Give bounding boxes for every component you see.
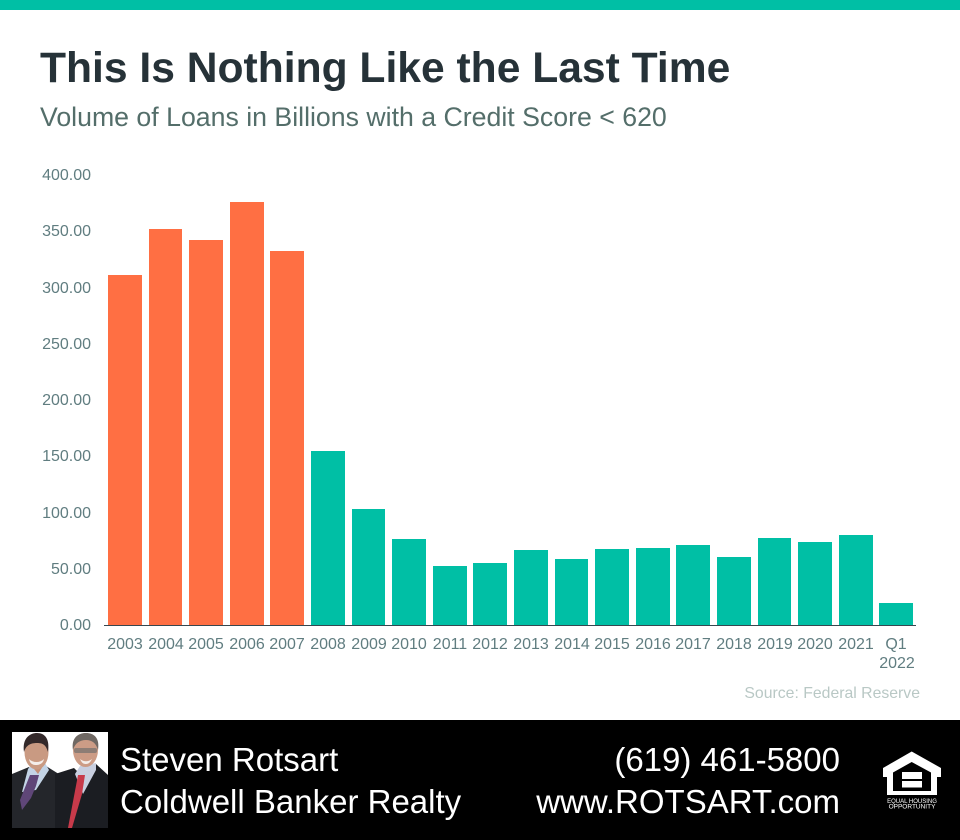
- left man: [12, 733, 64, 828]
- y axis labels: 200.00: [42, 392, 91, 409]
- x axis labels: [107, 636, 915, 672]
- agent photo: [12, 732, 108, 828]
- top accent bar: [0, 0, 960, 10]
- agent name and company: Steven Rotsart: [120, 741, 338, 778]
- y axis labels: 100.00: [42, 505, 91, 522]
- x axis labels: 2011: [433, 636, 467, 653]
- x axis labels: 2021: [838, 636, 874, 653]
- y axis labels: 350.00: [42, 223, 91, 240]
- x axis labels: 2015: [594, 636, 630, 653]
- title: This Is Nothing Like the Last Time: [40, 44, 730, 92]
- bar chart: [42, 167, 916, 672]
- icon: equal housing opportunity: [883, 752, 941, 810]
- x axis line: [104, 625, 916, 626]
- y axis labels: [42, 167, 91, 634]
- icon: equal housing opportunity: EQUAL HOUSING: [887, 799, 937, 805]
- x axis labels: 2016: [635, 636, 671, 653]
- footer band: [0, 720, 960, 840]
- x axis labels: 2003: [107, 636, 143, 653]
- icon: equal housing opportunity: OPPORTUNITY: [889, 804, 936, 810]
- x axis labels: 2013: [513, 636, 549, 653]
- y axis labels: 250.00: [42, 336, 91, 353]
- x axis labels: 2017: [675, 636, 711, 653]
- y axis labels: 50.00: [51, 561, 91, 578]
- x axis labels: 2008: [310, 636, 346, 653]
- agent name and company: Coldwell Banker Realty: [120, 783, 461, 820]
- subtitle: Volume of Loans in Billions with a Credit Score < 620: [40, 102, 667, 132]
- x axis labels: 2010: [391, 636, 427, 653]
- x axis labels: 2012: [472, 636, 508, 653]
- contact details: (619) 461-5800: [614, 741, 840, 778]
- y axis labels: 150.00: [42, 448, 91, 465]
- x axis labels: 2007: [269, 636, 305, 653]
- x axis labels: 2009: [351, 636, 387, 653]
- y axis labels: 0.00: [60, 617, 91, 634]
- contact details: www.ROTSART.com: [536, 783, 840, 820]
- x axis labels: 2005: [188, 636, 224, 653]
- agent name and company: [120, 741, 462, 820]
- orange bars 2003-2007: [108, 202, 304, 625]
- x axis labels: 2018: [716, 636, 752, 653]
- x axis labels: 2022: [879, 655, 915, 672]
- y axis labels: 400.00: [42, 167, 91, 184]
- y axis labels: 300.00: [42, 280, 91, 297]
- source note: Source: Federal Reserve: [744, 685, 920, 702]
- x axis labels: 2020: [797, 636, 833, 653]
- x axis labels: 2006: [229, 636, 265, 653]
- contact details: [536, 741, 840, 820]
- x axis labels: 2019: [757, 636, 793, 653]
- x axis labels: 2014: [554, 636, 590, 653]
- teal bars 2008-Q1 2022: [311, 451, 913, 625]
- right man: [55, 733, 108, 828]
- x axis labels: Q1: [885, 636, 907, 653]
- x axis labels: 2004: [148, 636, 184, 653]
